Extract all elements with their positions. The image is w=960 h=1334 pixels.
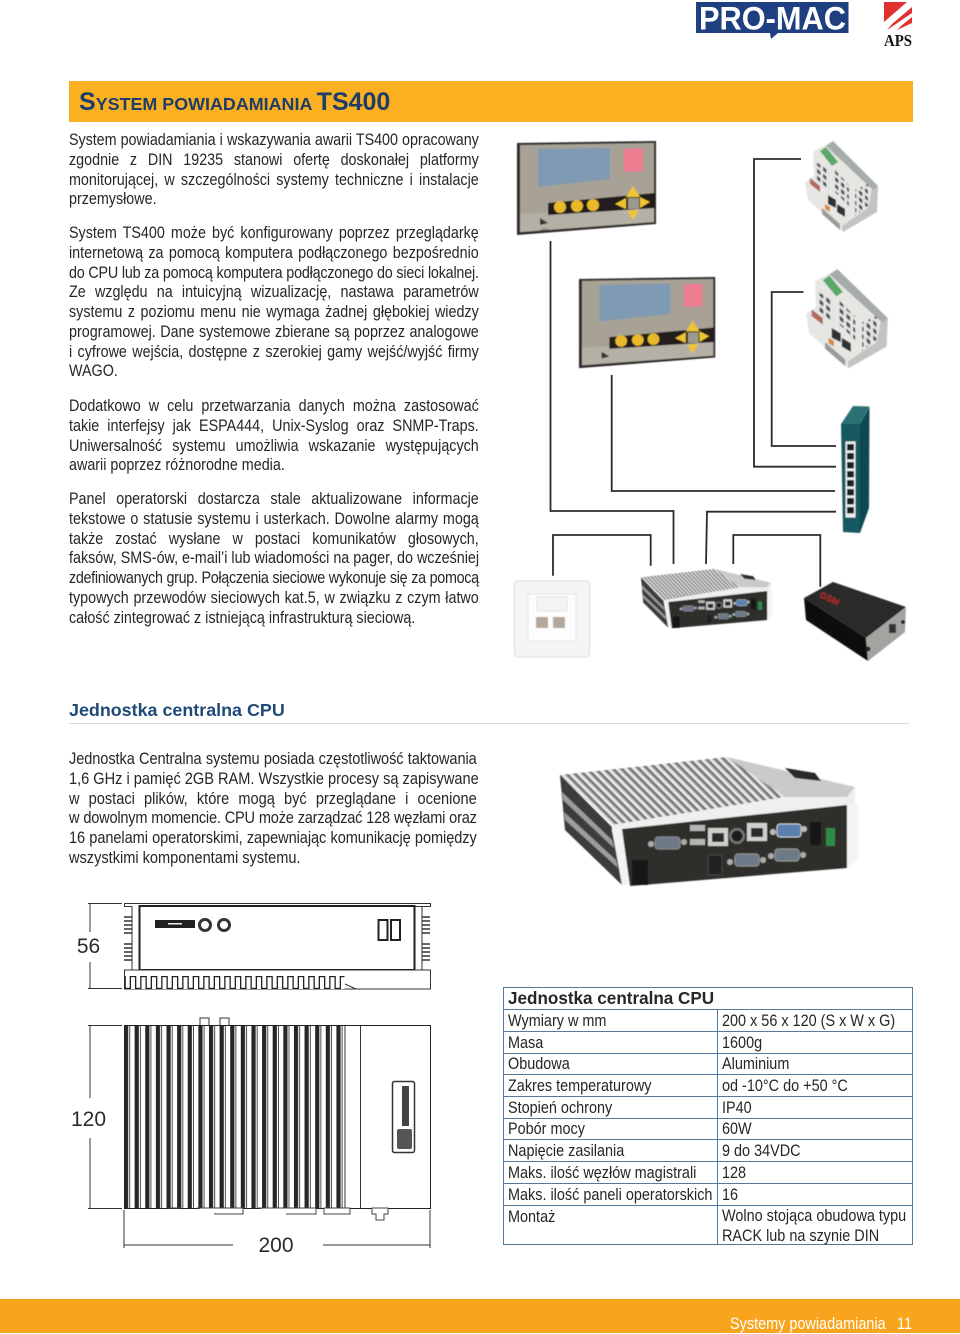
row: housing: Obudowa xyxy=(508,1055,570,1073)
row: mounting: Montaż xyxy=(508,1208,555,1226)
text block: paragraph 2: systemu z poziomu menu nie wymaga żadnej głębokiej wiedzy xyxy=(69,303,479,321)
row: bus nodes: Maks. ilość węzłów magistrali xyxy=(508,1164,696,1182)
dimension: 56: 56 xyxy=(77,935,100,958)
text block: paragraph 2: internetową za pomocą komputera podłączonego bezpośrednio xyxy=(69,244,479,262)
row: mounting xyxy=(504,1205,912,1244)
top view of the unit xyxy=(124,1018,430,1220)
text block: paragraph 1 xyxy=(69,131,479,208)
row: housing xyxy=(504,1052,912,1074)
logo: APS xyxy=(884,2,912,50)
row: protection: Stopień ochrony xyxy=(508,1098,612,1116)
text block: CPU description: w dowolnym momencie. CPU może zarządzać 128 węzłami oraz xyxy=(69,809,477,827)
text block: paragraph 4: zdefiniowanych grup. Połączenia sieciowe wykonuje się za pomocą xyxy=(69,569,479,587)
dimension: 120: 120 xyxy=(71,1108,106,1131)
GSM modem: GSM xyxy=(818,590,841,607)
text block: paragraph 2 xyxy=(69,224,479,380)
row: protection xyxy=(504,1096,912,1118)
row: mounting: Wolno stojąca obudowa typu xyxy=(722,1207,906,1225)
text block: paragraph 3: takie interfejsy jak ESPA444, Unix-Syslog oraz SNMP-Traps. xyxy=(69,417,479,435)
text block: paragraph 2: Ze względu na intuicyjną wizualizację, nastawa parametrów xyxy=(69,283,479,301)
text block: paragraph 4: Panel operatorski dostarcza stale aktualizowane informacje xyxy=(69,490,479,508)
dimension lines xyxy=(88,904,430,1248)
row: supply voltage xyxy=(504,1139,912,1161)
row: protection: IP40 xyxy=(722,1098,752,1116)
embedded CPU, large photo xyxy=(560,757,858,886)
text block: paragraph 2: WAGO. xyxy=(69,362,118,380)
wiring between devices xyxy=(550,159,836,587)
row: temperature range: od -10°C do +50 °C xyxy=(722,1076,848,1094)
network switch xyxy=(841,406,870,533)
text block: CPU description: 1,6 GHz i pamięć 2GB RAM. Wszystkie procesy są zapisywane xyxy=(69,770,479,788)
operator panel 1: APS xyxy=(541,227,549,232)
GSM modem xyxy=(804,582,906,661)
row: operator panels: 16 xyxy=(722,1186,738,1204)
title: SYSTEM POWIADAMIANIA TS400 xyxy=(79,88,390,116)
footer label: Systemy powiadamiania xyxy=(730,1315,886,1333)
header bar with title xyxy=(69,81,913,122)
logo: PRO-MAC: PRO-MAC xyxy=(699,0,846,36)
front view of the unit xyxy=(124,904,430,989)
section heading: CPU: Jednostka centralna CPU xyxy=(69,700,285,720)
text block: paragraph 1: System powiadamiania i wskazywania awarii TS400 opracowany xyxy=(69,131,479,149)
embedded CPU, small photo xyxy=(641,569,772,628)
text block: paragraph 1: zgodnie z DIN 19235 stanowi ofertę doskonałej platformy xyxy=(69,151,479,169)
text block: paragraph 3: Dodatkowo w celu przetwarzania danych można zastosować xyxy=(69,397,479,415)
WAGO controller 2 xyxy=(806,269,888,368)
row: dimensions xyxy=(504,1009,912,1031)
page number: 11 xyxy=(897,1315,912,1333)
row: supply voltage: 9 do 34VDC xyxy=(722,1142,801,1160)
text block: CPU description xyxy=(69,750,479,867)
row: power draw: Pobór mocy xyxy=(508,1120,585,1138)
text block: paragraph 3: Uniwersalność systemu umożliwia wskazanie występujących xyxy=(69,436,479,454)
row: temperature range xyxy=(504,1074,912,1096)
text block: paragraph 1: monitorującej, w szczególności systemy techniczne i instalacje xyxy=(69,170,479,188)
text block: CPU description: 16 panelami operatorskimi, zapewniając komunikację pomiędzy xyxy=(69,829,477,847)
text block: paragraph 4: typowych przewodów sieciowych kat.5, w związku z czym łatwo xyxy=(69,589,479,607)
table: CPU specification xyxy=(503,987,913,1245)
logo: APS: APS xyxy=(884,31,912,50)
row: power draw: 60W xyxy=(722,1120,752,1138)
operator panel 2: APS xyxy=(603,362,611,367)
text block: CPU description: w postaci plików, które mogą być przeglądane i ocenione xyxy=(69,790,477,808)
text block: paragraph 2: programowej. Dane systemowe zbierane są poprzez analogowe xyxy=(69,323,479,341)
text block: paragraph 4: całość zintegrować z istniejącą infrastrukturą sieciową. xyxy=(69,608,415,626)
row: supply voltage: Napięcie zasilania xyxy=(508,1142,624,1160)
row: operator panels xyxy=(504,1183,912,1205)
text block: paragraph 4: tekstowe o statusie systemu i usterkach. Dowolne alarmy mogą xyxy=(69,510,479,528)
table header: Jednostka centralna CPU xyxy=(508,989,714,1008)
text block: paragraph 4: także zostać wysłane w postaci komunikatów głosowych, xyxy=(69,530,479,548)
text block: paragraph 4 xyxy=(69,490,480,626)
text block: paragraph 2: do CPU lub za pomocą komputera podłączonego do sieci lokalnej. xyxy=(69,264,479,282)
technical drawing with dimensions xyxy=(71,904,430,1257)
row: bus nodes: 128 xyxy=(722,1164,746,1182)
text block: paragraph 2: System TS400 może być konfigurowany poprzez przeglądarkę xyxy=(69,224,479,242)
operator panel 1 xyxy=(517,141,656,235)
row: temperature range: Zakres temperaturowy xyxy=(508,1076,651,1094)
row: mass: 1600g xyxy=(722,1034,762,1052)
text block: paragraph 3 xyxy=(69,397,479,474)
row: mounting: RACK lub na szynie DIN xyxy=(722,1227,879,1245)
text block: CPU description: wszystkimi komponentami systemu. xyxy=(69,849,301,867)
WAGO controller 1 xyxy=(805,141,878,232)
row: mass: Masa xyxy=(508,1034,543,1052)
text block: CPU description: Jednostka Centralna systemu posiada częstotliwość taktowania xyxy=(69,750,477,768)
dimension: 200: 200 xyxy=(258,1234,294,1257)
network wall socket xyxy=(514,581,590,657)
text block: paragraph 2: i cyfrowe wejścia, dostępne z szerokiej gamy wejść/wyjść firmy xyxy=(69,342,479,360)
row: dimensions: 200 x 56 x 120 (S x W x G) xyxy=(722,1012,895,1030)
row: dimensions: Wymiary w mm xyxy=(508,1012,606,1030)
row: power draw xyxy=(504,1118,912,1140)
text block: paragraph 3: awarii poprzez różnorodne media. xyxy=(69,456,285,474)
text block: paragraph 4: faksów, SMS-ów, e-mail’i lub wiadomości na pager, do wcześniej xyxy=(69,549,479,567)
row: bus nodes xyxy=(504,1161,912,1183)
row: operator panels: Maks. ilość paneli operatorskich xyxy=(508,1186,712,1204)
row: housing: Aluminium xyxy=(722,1055,789,1073)
text block: paragraph 1: przemysłowe. xyxy=(69,190,157,208)
footer bar xyxy=(0,1299,960,1333)
operator panel 2 xyxy=(579,277,715,368)
row: mass xyxy=(504,1031,912,1053)
